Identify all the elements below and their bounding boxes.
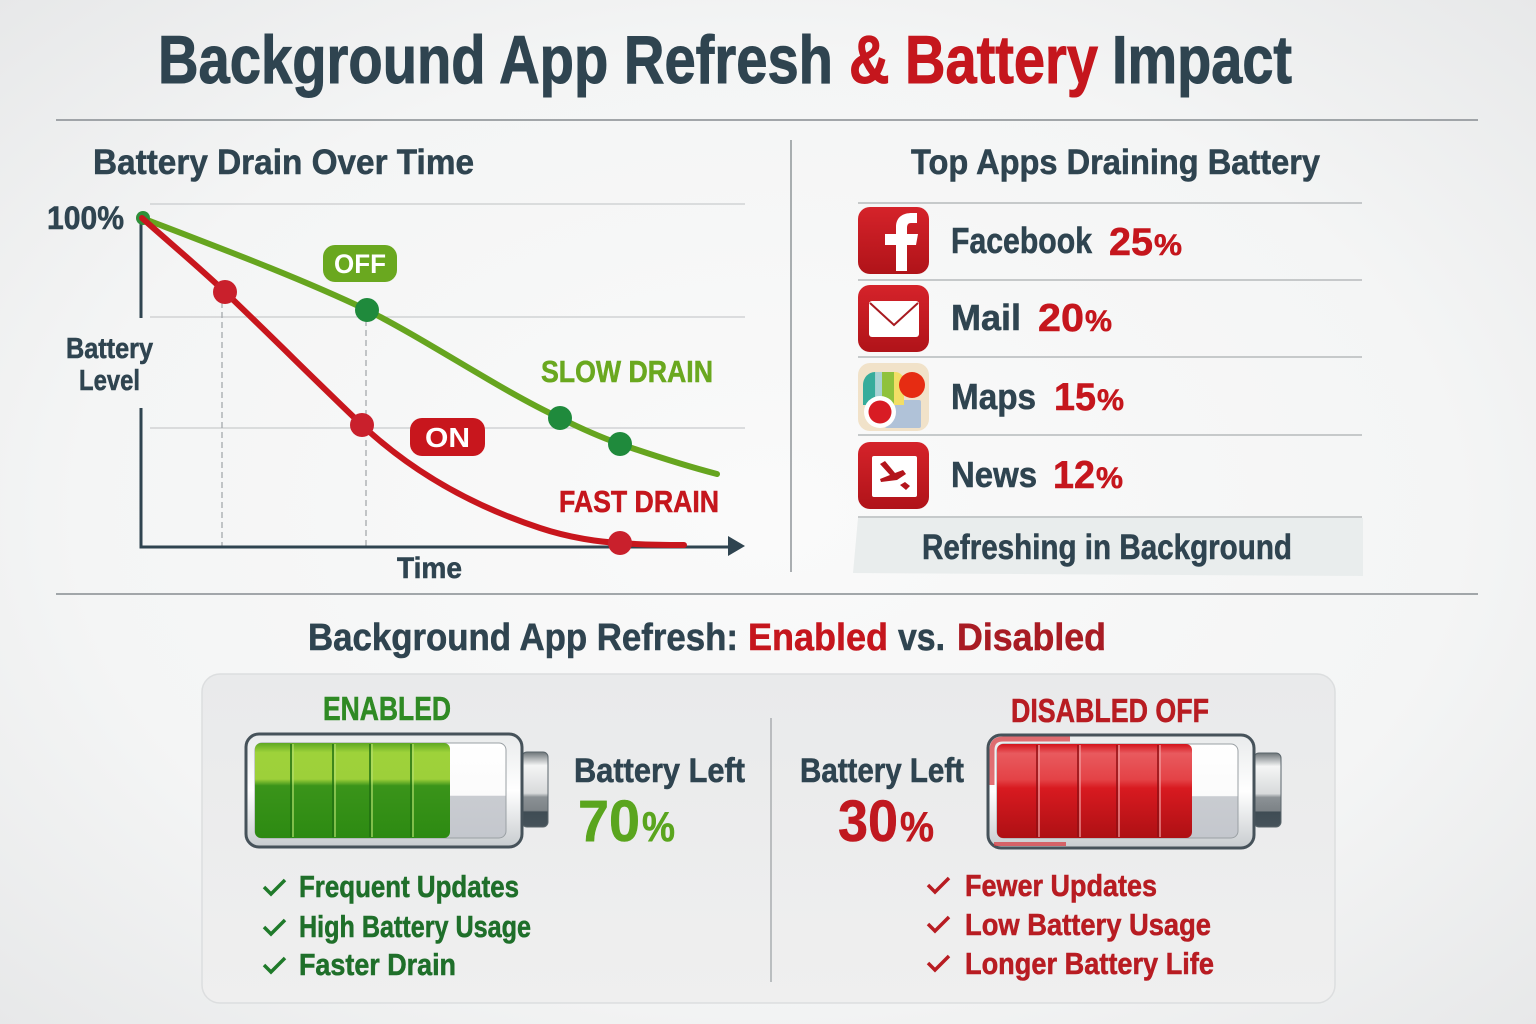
y axis label: Level xyxy=(79,365,140,397)
stat: battery left 70%: Battery Left xyxy=(574,752,745,790)
stat: battery left 70%: 70 xyxy=(578,789,640,854)
curve: on fast drain xyxy=(142,218,684,555)
icon: maps xyxy=(858,363,929,431)
list: disabled effects xyxy=(928,868,1214,981)
list: disabled effects: Low Battery Usage xyxy=(965,907,1211,942)
heading: enabled vs disabled xyxy=(308,617,1106,659)
row: news xyxy=(951,454,1123,497)
stat: battery left 30%: Battery Left xyxy=(800,752,964,790)
stat: battery left 70% xyxy=(574,752,745,854)
stat: battery left 30% xyxy=(800,752,964,854)
row: facebook xyxy=(951,220,1182,264)
panel: top apps xyxy=(853,143,1363,576)
heading: battery drain over time: Battery Drain Over Time xyxy=(93,143,474,182)
list: enabled effects: Frequent Updates xyxy=(299,869,519,904)
title: Background App Refresh xyxy=(158,22,833,98)
list: enabled effects: High Battery Usage xyxy=(299,909,531,944)
row: maps: 15 xyxy=(1054,376,1096,419)
x axis label: Time xyxy=(397,552,462,585)
list: enabled effects xyxy=(264,869,531,982)
list: disabled effects: Longer Battery Life xyxy=(965,946,1214,981)
pill: on: ON xyxy=(425,422,470,453)
y axis label: Battery xyxy=(66,333,153,365)
title: Impact xyxy=(1112,22,1292,98)
pill: on xyxy=(410,418,485,456)
curve: off slow drain xyxy=(136,211,717,474)
title: & Battery xyxy=(849,22,1098,98)
y axis value label: 100% xyxy=(47,200,124,236)
row: facebook: % xyxy=(1154,229,1182,262)
row: news: % xyxy=(1096,462,1123,495)
stat: battery left 30%: 30 xyxy=(838,789,898,854)
label: fast drain: FAST DRAIN xyxy=(559,484,719,519)
row: news: News xyxy=(951,454,1037,495)
x axis arrow xyxy=(728,536,745,556)
pill: off: OFF xyxy=(334,249,386,279)
row: maps: % xyxy=(1097,384,1124,417)
banner: refreshing in background: Refreshing in Background xyxy=(922,528,1292,567)
list: enabled effects: Faster Drain xyxy=(299,947,456,982)
row: mail: % xyxy=(1085,305,1112,338)
icon: red battery 30% xyxy=(988,735,1281,848)
heading: enabled vs disabled: Background App Refresh: xyxy=(308,617,738,659)
label: slow drain: SLOW DRAIN xyxy=(541,354,713,389)
row: mail: Mail xyxy=(951,297,1021,338)
icon: mail xyxy=(858,285,929,352)
row: maps: Maps xyxy=(951,376,1036,417)
panel: battery drain chart xyxy=(47,143,745,585)
row: maps xyxy=(951,376,1124,419)
row: mail: 20 xyxy=(1038,297,1084,340)
icon: facebook xyxy=(858,207,929,274)
heading: top apps: Top Apps Draining Battery xyxy=(911,143,1320,182)
pill: off xyxy=(323,245,397,282)
icon: news xyxy=(858,442,929,509)
row: facebook: 25 xyxy=(1109,221,1153,264)
panel: comparison xyxy=(202,674,1335,1003)
chart axes xyxy=(141,222,732,547)
row: facebook: Facebook xyxy=(951,220,1093,261)
row: mail xyxy=(951,297,1112,340)
row: news: 12 xyxy=(1053,454,1095,497)
stat: battery left 30%: % xyxy=(900,803,934,850)
heading: enabled vs disabled: vs. xyxy=(898,617,945,659)
label: disabled off: DISABLED OFF xyxy=(1011,692,1209,729)
y axis label xyxy=(66,333,153,397)
banner: refreshing in background xyxy=(853,518,1363,576)
icon: green battery 70% xyxy=(246,734,548,847)
list: disabled effects: Fewer Updates xyxy=(965,868,1157,903)
heading: enabled vs disabled: Enabled xyxy=(748,617,888,659)
label: enabled: ENABLED xyxy=(323,690,451,727)
stat: battery left 70%: % xyxy=(642,803,675,850)
heading: enabled vs disabled: Disabled xyxy=(957,617,1106,659)
